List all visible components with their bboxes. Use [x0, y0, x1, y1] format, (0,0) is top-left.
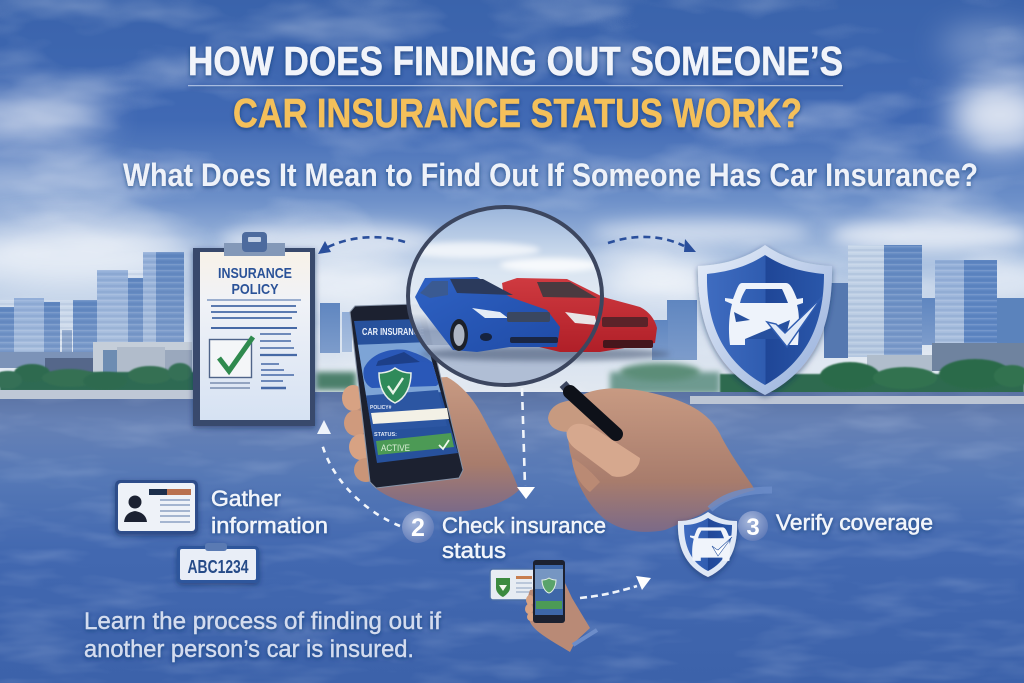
- title: HOW DOES FINDING OUT SOMEONE’S: [188, 38, 843, 84]
- step 2 label: Check insurance: [442, 513, 606, 538]
- phone with insurance app: POLICY#: [370, 405, 392, 411]
- right hand and handle: [548, 384, 772, 532]
- policy text lines: [207, 300, 301, 388]
- step 2 label: [442, 513, 606, 563]
- magnifying glass with cars: [400, 207, 772, 532]
- step 3 number badge: 3: [746, 514, 760, 541]
- active status badge: ACTIVE: [381, 443, 410, 454]
- step 2 label: status: [442, 538, 506, 563]
- status label: STATUS:: [374, 432, 397, 438]
- phone shield: [379, 368, 411, 403]
- dashed arrow: toward shield: [608, 237, 696, 252]
- footer description: [84, 608, 441, 663]
- red car: [502, 278, 657, 352]
- title: [188, 38, 843, 136]
- phone heading: CAR INSURANCE: [362, 326, 424, 338]
- title: CAR INSURANCE STATUS WORK?: [233, 90, 802, 136]
- license plate icon: [177, 543, 259, 583]
- tree line: [0, 359, 1024, 396]
- policy checkbox with check: [210, 337, 253, 388]
- skyline: right buildings: [652, 245, 1024, 375]
- large shield with car and check: [698, 245, 832, 395]
- skyline: left buildings: [0, 252, 352, 375]
- footer description: Learn the process of finding out if: [84, 608, 441, 635]
- step 1 label: information: [211, 513, 328, 538]
- blue car: [415, 277, 560, 352]
- clipboard clip: [224, 232, 285, 256]
- policy heading: INSURANCE: [218, 265, 292, 282]
- step 1 label: Gather: [211, 486, 281, 511]
- dashed arrow: toward clipboard: [318, 237, 405, 254]
- policy heading: POLICY: [232, 281, 278, 298]
- policy field: [371, 408, 449, 424]
- phone with insurance app: [350, 304, 463, 488]
- magnifier ring: [408, 207, 602, 385]
- small card and phone in hand: [490, 560, 597, 652]
- step 2 number badge: [402, 511, 434, 543]
- step 1: ID card icon: [115, 480, 198, 534]
- step 3 number badge: [738, 511, 768, 541]
- background sky: [0, 0, 1024, 400]
- license plate icon: ABC1234: [188, 557, 248, 577]
- clipboard: insurance policy: [193, 232, 315, 426]
- step 1 label: [211, 486, 328, 538]
- active status badge: [376, 433, 454, 455]
- road surface: [0, 390, 1024, 683]
- footer description: another person’s car is insured.: [84, 636, 414, 663]
- policy heading: [218, 265, 292, 298]
- shield checkmark: [767, 297, 822, 347]
- dashed arrow: small white: [580, 576, 651, 598]
- left hand holding phone: [342, 377, 519, 512]
- step 3 small shield icon: [678, 512, 737, 577]
- dashed arrow: white from status to lens: [317, 420, 400, 526]
- step 2 number badge: 2: [411, 514, 425, 542]
- shield car icon: [725, 283, 803, 345]
- dashed arrow: white downward: [517, 388, 535, 499]
- step 3 label: Verify coverage: [776, 510, 933, 535]
